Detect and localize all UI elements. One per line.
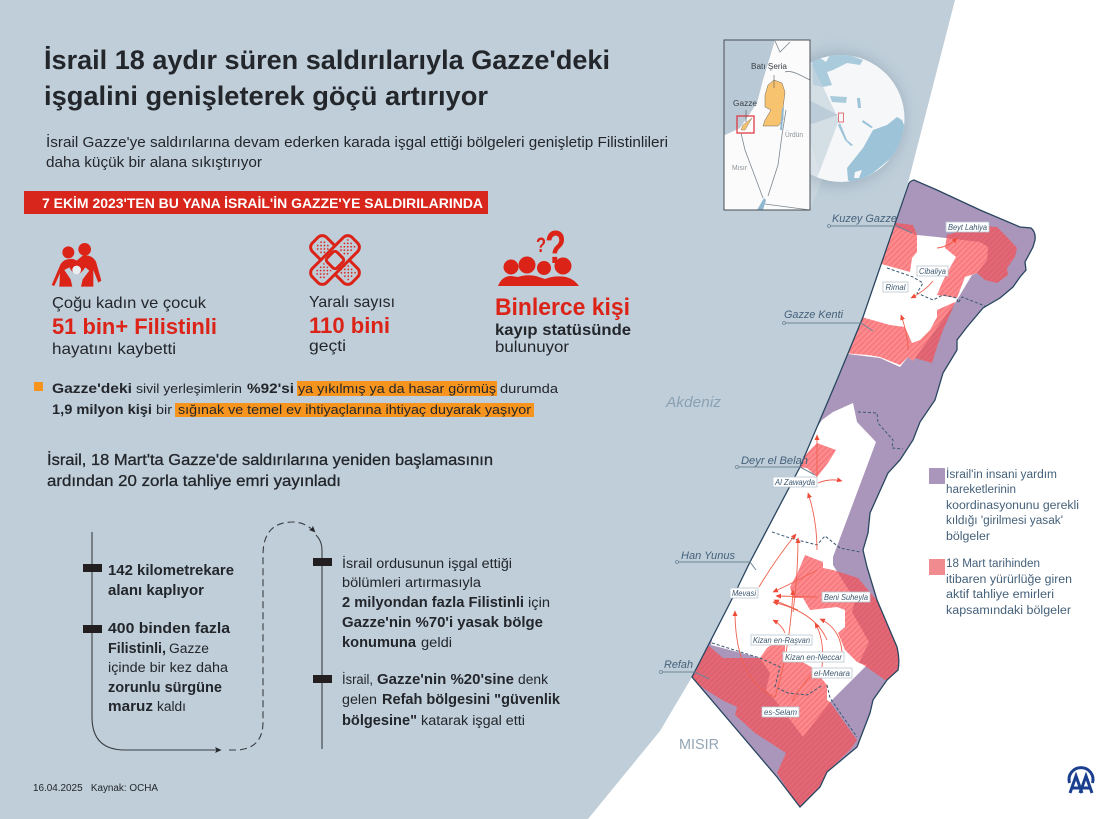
evacuation zone: north-west	[882, 223, 917, 272]
globe	[810, 48, 909, 208]
section heading	[47, 451, 493, 490]
evacuation zone: south of Gaza City	[842, 302, 955, 365]
evacuation zone: Beyt Lahiya	[937, 225, 1017, 298]
evacuation zone: Deyr el Belah	[800, 443, 836, 476]
timeline right text: Refah bölgesini "güvenlik	[382, 692, 561, 708]
red banner: 7 EKİM 2023'TEN BU YANA İSRAİL'İN GAZZE'YE SALDIRILARINDA	[42, 195, 483, 211]
highlighted facts: Gazze'deki	[52, 380, 132, 396]
timeline right text: gelen	[342, 692, 377, 707]
governorate callouts	[660, 213, 912, 679]
subtitle: İsrail Gazze'ye saldırılarına devam ederken karada işgal ettiği bölgeleri genişletip Filistinlileri	[46, 133, 668, 151]
beam over globe	[810, 62, 838, 178]
stat: killed: 51 bin+ Filistinli	[52, 314, 217, 339]
highlight 1	[297, 381, 497, 396]
highlighted facts: durumda	[500, 381, 559, 396]
red locator	[737, 116, 754, 133]
map place labels	[730, 222, 989, 717]
highlighted facts: sivil yerleşimlerin	[136, 381, 242, 396]
stat: killed: hayatını kaybetti	[52, 341, 176, 358]
timeline right text: geldi	[421, 635, 452, 650]
globe locator	[838, 113, 844, 122]
title: İsrail 18 aydır süren saldırılarıyla Gazze'deki	[44, 45, 610, 75]
map place labels: Mevasi	[732, 589, 756, 598]
West Bank	[763, 80, 785, 126]
map place labels: Beyt Lahiya	[948, 223, 988, 232]
highlighted facts: bir	[156, 402, 173, 417]
AA logo	[1069, 768, 1093, 793]
legend: itibaren yürürlüğe giren	[946, 574, 1072, 586]
timeline right text: 2 milyondan fazla Filistinli	[342, 595, 524, 611]
governorate callouts: Han Yunus	[681, 550, 735, 562]
legend: 18 Mart tarihinden	[946, 558, 1040, 570]
legend: kıldığı 'girilmesi yasak'	[946, 515, 1063, 527]
stat: wounded: 110 bini	[309, 313, 390, 338]
timeline left text: kaldı	[157, 699, 186, 714]
inset locator map: Gazze	[733, 99, 758, 108]
timeline left text: Filistinli,	[108, 641, 166, 657]
icon: crowd with question marks	[498, 221, 579, 286]
open areas north	[840, 225, 988, 367]
map place labels: Al Zawayda	[774, 478, 816, 487]
sea	[724, 40, 775, 135]
icon: crowd with question marks: ?	[536, 234, 546, 257]
timeline right text	[313, 556, 561, 729]
inset locator map	[724, 40, 810, 210]
timeline left text: 400 binden fazla	[108, 621, 231, 637]
governorate callouts: Kuzey Gazze	[832, 213, 897, 225]
timeline path	[92, 522, 322, 750]
timeline right text: denk	[518, 672, 548, 687]
bullet	[34, 382, 43, 391]
timeline right text: için	[528, 595, 550, 610]
open areas centre and south	[711, 403, 876, 737]
governorate callouts: Gazze Kenti	[784, 309, 844, 321]
timeline right text: bölümleri artırmasıyla	[342, 575, 482, 590]
timeline right text: İsrail,	[342, 672, 373, 687]
Gaza map	[690, 180, 1035, 810]
legend	[929, 468, 1079, 617]
timeline left text: alanı kaplıyor	[108, 583, 204, 599]
legend: hareketlerinin	[946, 484, 1016, 496]
legend: bölgeler	[946, 531, 990, 543]
Egypt label: MISIR	[679, 736, 719, 753]
date and source: 16.04.2025 Kaynak: OCHA	[33, 783, 158, 794]
map place labels: Cibaliya	[919, 267, 947, 276]
restricted zone base	[692, 180, 1035, 807]
inset locator map: Batı Şeria	[751, 62, 788, 71]
map place labels: Kizan en-Neccar	[785, 653, 842, 662]
timeline left text: 142 kilometrekare	[108, 563, 234, 579]
timeline right text: Gazze'nin %70'i yasak bölge	[342, 615, 543, 631]
title	[44, 45, 610, 111]
displacement arrows	[735, 238, 957, 701]
legend: koordinasyonunu gerekli	[946, 500, 1079, 512]
inset locator map: Ürdün	[785, 131, 803, 139]
highlighted facts: ya yıkılmış ya da hasar görmüş	[298, 381, 497, 396]
section heading: ardından 20 zorla tahliye emri yayınladı	[47, 473, 341, 490]
section heading: İsrail, 18 Mart'ta Gazze'de saldırılarına yeniden başlamasının	[47, 451, 493, 469]
map place labels: el-Menara	[814, 669, 851, 678]
timeline right text: İsrail ordusunun işgal ettiği	[342, 556, 512, 571]
highlighted facts	[34, 380, 559, 417]
icon: crossed bandages	[308, 233, 362, 287]
timeline left text	[83, 563, 234, 715]
title: işgalini genişleterek göçü artırıyor	[44, 81, 488, 111]
governorate callouts: Refah	[664, 659, 693, 671]
Gaza outline	[692, 180, 1035, 807]
beam below globe	[810, 140, 822, 210]
timeline left text: Gazze	[169, 641, 209, 656]
subtitle	[46, 133, 668, 171]
stat: missing	[495, 221, 631, 356]
stat: wounded	[308, 233, 395, 355]
stat: missing: kayıp statüsünde	[495, 322, 631, 339]
evacuation zone: Refah	[690, 635, 857, 810]
timeline right text: katarak işgal etti	[421, 713, 525, 728]
sea label: Akdeniz	[665, 395, 722, 411]
timeline right text: bölgesine"	[342, 713, 417, 729]
legend: kapsamındaki bölgeler	[946, 605, 1071, 617]
governorate boundaries	[712, 268, 985, 737]
timeline right text: konumuna	[342, 635, 417, 651]
stat: killed: Çoğu kadın ve çocuk	[52, 295, 207, 312]
map place labels: Beni Suheyla	[824, 593, 869, 602]
timeline right text: Gazze'nin %20'sine	[377, 672, 514, 688]
map place labels: Rimal	[886, 283, 906, 292]
stat: missing: Binlerce kişi	[495, 294, 630, 321]
highlighted facts: 1,9 milyon kişi	[52, 401, 152, 417]
borders	[741, 41, 810, 210]
governorate callouts: Deyr el Belah	[741, 455, 808, 467]
Gaza mini	[741, 118, 752, 130]
icon: family	[52, 243, 101, 287]
map place labels: es-Selam	[764, 708, 797, 717]
subtitle: daha küçük bir alana sıkıştırıyor	[46, 154, 262, 171]
stat: killed	[52, 243, 217, 358]
evacuation zone: Beni Suheyla	[790, 555, 905, 680]
stat: missing: bulunuyor	[495, 339, 570, 356]
stat: wounded: Yaralı sayısı	[309, 294, 395, 311]
inset locator map: Mısır	[732, 165, 748, 172]
timeline left text: zorunlu sürgüne	[108, 680, 222, 696]
timeline left text: içinde bir kez daha	[108, 660, 229, 675]
red banner	[24, 191, 488, 214]
highlighted facts: %92'si	[247, 380, 294, 396]
map place labels: Kizan en-Raşvan	[753, 636, 811, 645]
icon: crowd with question marks: ?	[545, 221, 566, 273]
oceans	[847, 117, 906, 184]
legend: aktif tahliye emirleri	[946, 589, 1054, 601]
highlight 2	[175, 403, 534, 417]
timeline left text: maruz	[108, 699, 153, 715]
legend: İsrail'in insani yardım	[946, 468, 1057, 481]
highlighted facts: sığınak ve temel ev ihtiyaçlarına ihtiyaç duyarak yaşıyor	[178, 402, 532, 417]
stat: wounded: geçti	[309, 338, 346, 355]
